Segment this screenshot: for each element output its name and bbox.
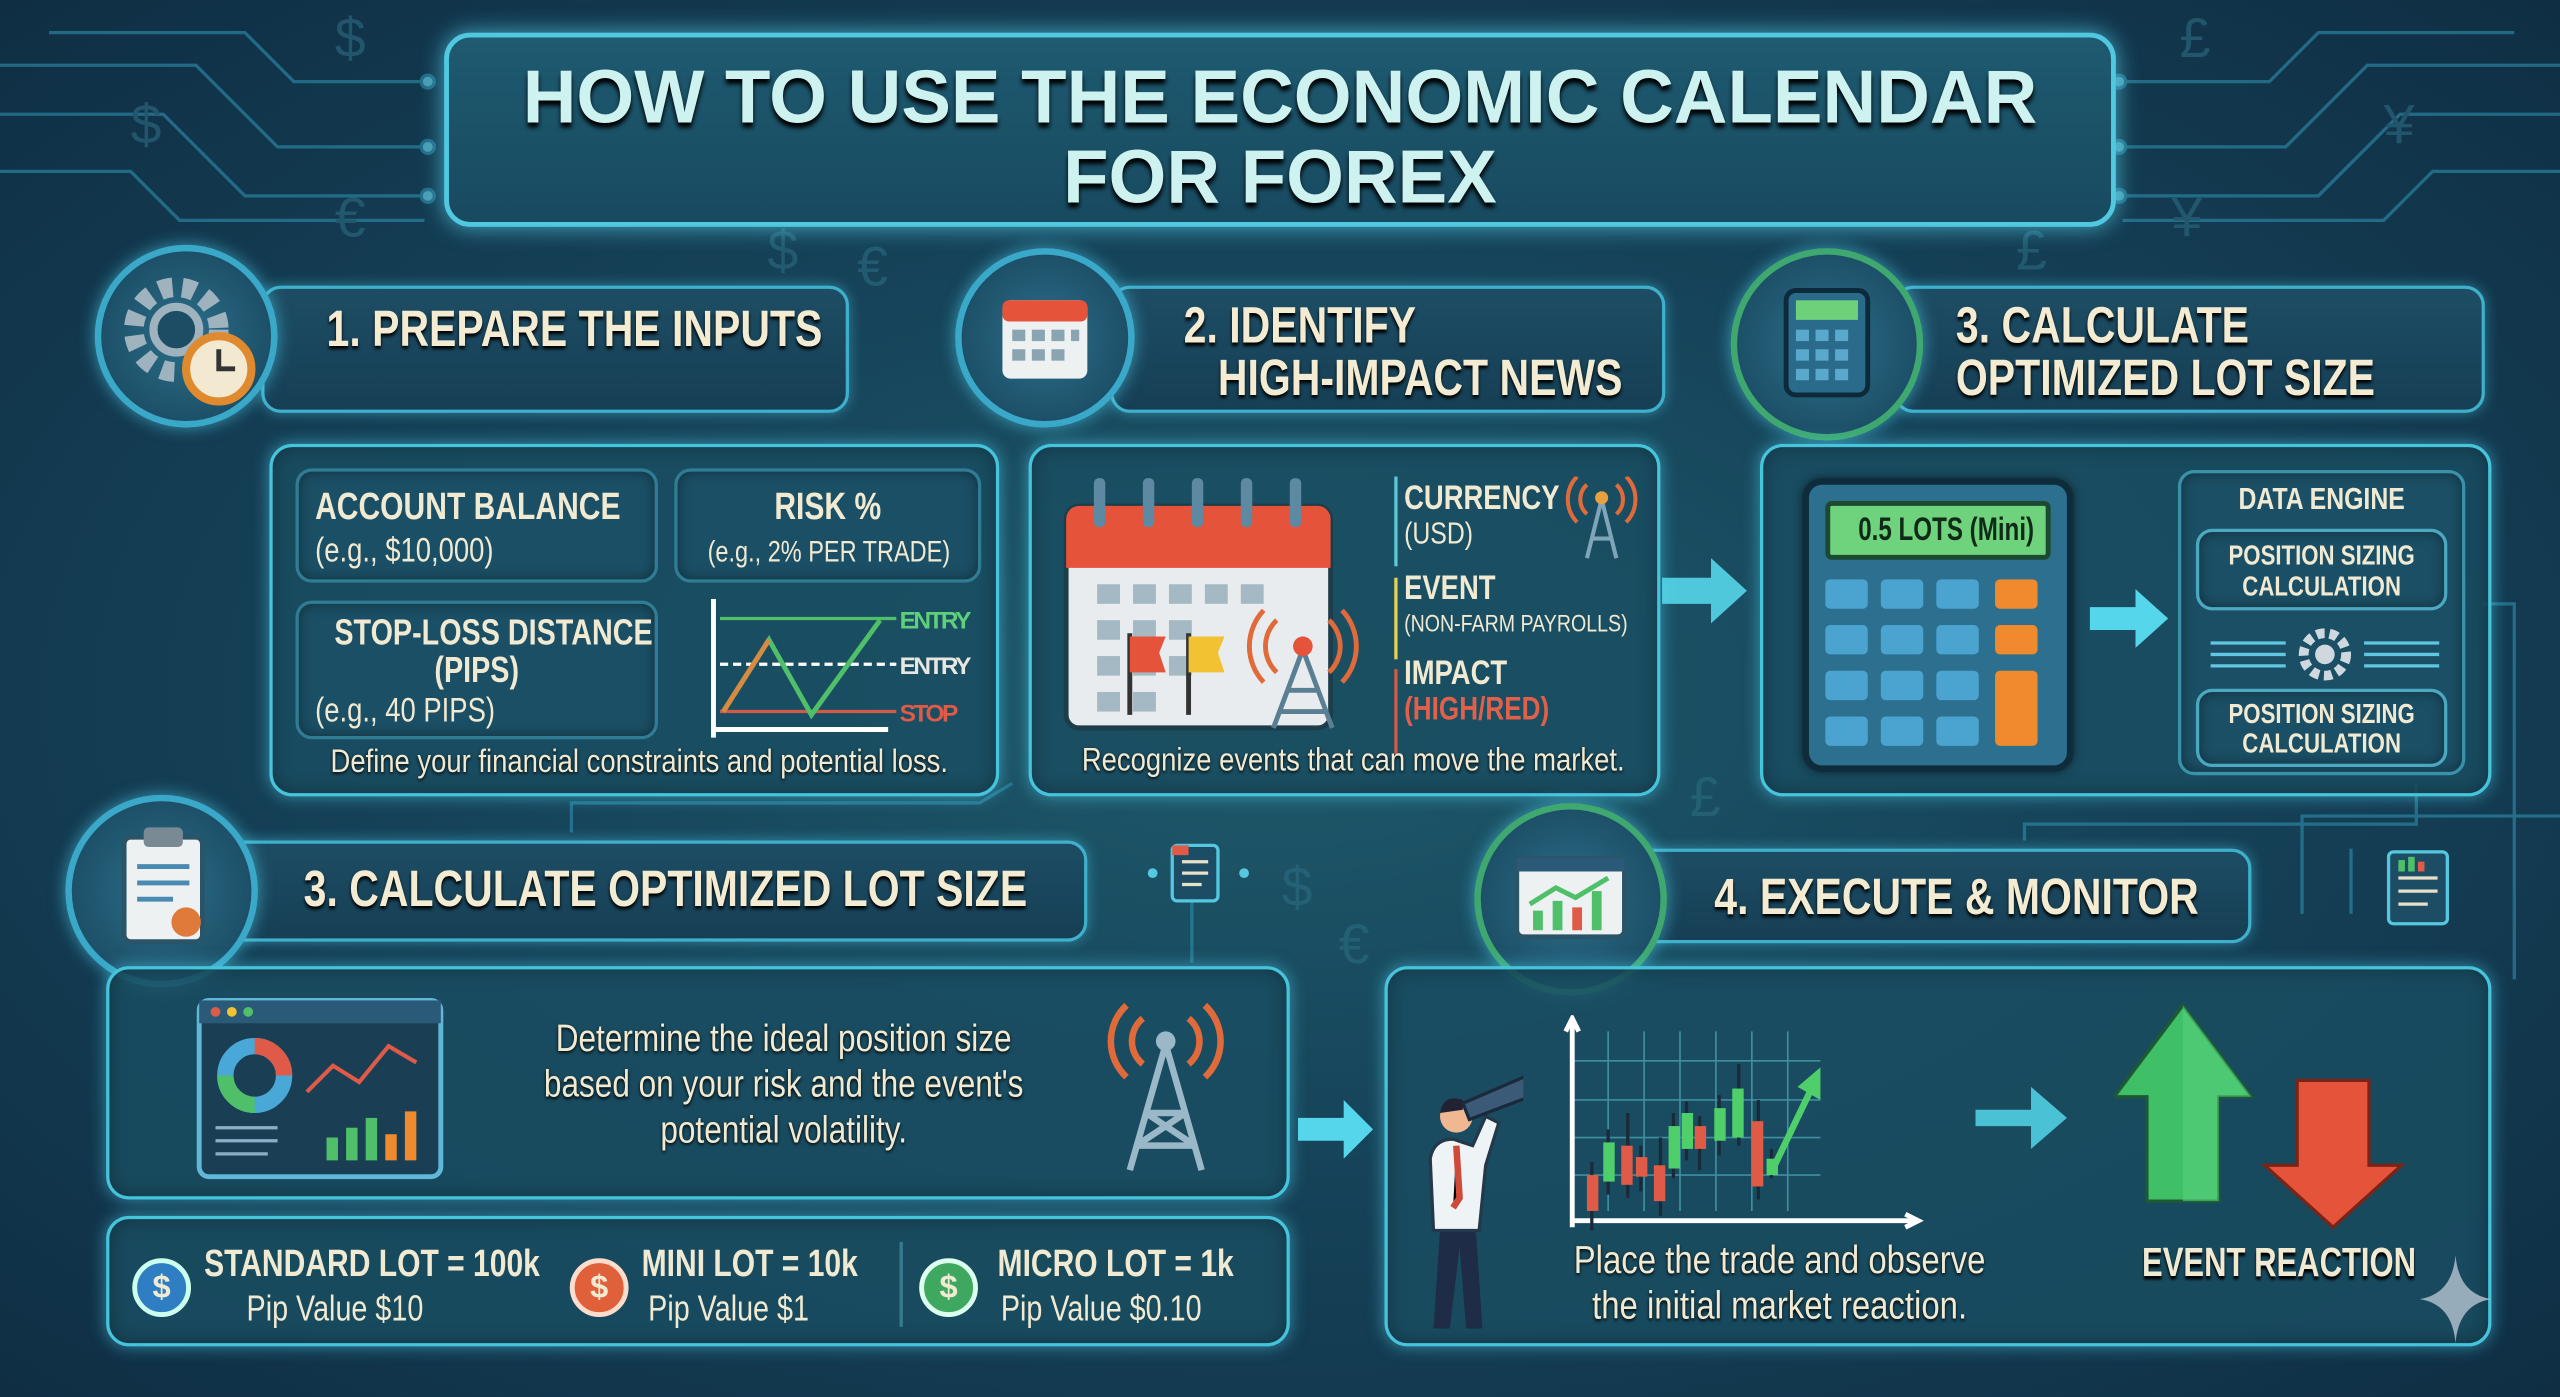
arrow	[1976, 1087, 2067, 1149]
labels: currency event impact: EVENT	[1404, 570, 1496, 607]
micro lot: Pip Value $0.10	[1001, 1288, 1202, 1328]
step 2 header	[945, 238, 1672, 438]
account balance box: ACCOUNT BALANCE	[315, 485, 621, 527]
icon: sparkle	[2420, 1256, 2492, 1343]
risk box: (e.g., 2% PER TRADE)	[708, 535, 950, 568]
data engine box: CALCULATION	[2242, 571, 2401, 602]
micro lot: MICRO LOT = 1k	[998, 1242, 1234, 1284]
labels: currency event impact: (HIGH/RED)	[1404, 692, 1549, 728]
data engine box	[2178, 470, 2465, 775]
background circuit decoration: €	[857, 236, 888, 298]
mini lot	[570, 1242, 858, 1328]
step 3b header	[55, 784, 1094, 988]
chart: entry stop: STOP	[900, 700, 958, 727]
background circuit decoration: $	[1282, 856, 1312, 918]
panel: calculate lot size	[1760, 444, 2491, 796]
background circuit decoration: $	[767, 219, 798, 281]
data engine box: DATA ENGINE	[2238, 483, 2405, 517]
standard lot: STANDARD LOT = 100k	[204, 1242, 540, 1284]
chart: entry stop: ENTRY	[900, 607, 971, 634]
stop-loss box	[296, 601, 658, 739]
background circuit decoration: £	[2016, 219, 2047, 281]
chart: candlesticks	[1564, 1015, 1924, 1230]
title	[444, 33, 2116, 227]
background circuit decoration: $	[131, 94, 161, 156]
title: HOW TO USE THE ECONOMIC CALENDAR	[523, 54, 2037, 139]
chart: entry stop: ENTRY	[900, 653, 971, 680]
caption: Place the trade and observe	[1574, 1239, 1985, 1283]
step 4 header: 4. EXECUTE & MONITOR	[1714, 868, 2199, 925]
caption: Define your financial constraints and potential loss.	[331, 744, 948, 780]
icon: calendar	[955, 248, 1135, 428]
stop-loss box: (PIPS)	[434, 650, 519, 690]
text block	[544, 1017, 1024, 1154]
icon: small document node	[1148, 844, 1249, 902]
arrow: panel 2 to 3	[1662, 558, 1747, 624]
mini lot: MINI LOT = 10k	[642, 1242, 858, 1284]
step 2 header: 2. IDENTIFY	[1184, 297, 1416, 354]
background circuit decoration: €	[1339, 913, 1370, 975]
micro lot	[919, 1242, 1234, 1328]
step 2 header: HIGH-IMPACT NEWS	[1218, 349, 1622, 406]
icon: calculator 0.5 lots: 0.5 LOTS (Mini)	[1858, 512, 2034, 548]
icon: dashboard	[196, 998, 444, 1180]
stop-loss box: STOP-LOSS DISTANCE	[334, 612, 653, 653]
step 4 header	[1465, 796, 2259, 996]
step 3 header: 3. CALCULATE	[1956, 297, 2249, 354]
icon: clipboard	[65, 795, 258, 987]
labels: currency event impact: (USD)	[1404, 517, 1473, 552]
panel: execute and monitor	[1384, 966, 2491, 1346]
title: FOR FOREX	[1063, 134, 1497, 219]
risk box	[674, 468, 981, 583]
labels: currency event impact: IMPACT	[1404, 654, 1507, 692]
data engine box: CALCULATION	[2242, 728, 2401, 759]
panel: prepare inputs	[269, 444, 999, 796]
account balance box	[296, 468, 658, 583]
data engine box: POSITION SIZING	[2228, 540, 2415, 571]
icon: calculator	[1731, 248, 1923, 441]
label: event reaction: EVENT REACTION	[2142, 1240, 2416, 1286]
icon: gear and clock	[95, 245, 278, 428]
icon: tower	[1108, 1002, 1224, 1171]
step 3 header: OPTIMIZED LOT SIZE	[1956, 349, 2375, 406]
data engine box: POSITION SIZING	[2228, 698, 2415, 730]
background circuit decoration: €	[335, 187, 366, 249]
labels: currency event impact: (NON-FARM PAYROLLS)	[1404, 610, 1628, 638]
icon: calculator 0.5 lots	[1802, 478, 2073, 772]
icon: calendar with flags and tower	[1064, 478, 1359, 730]
step 3 header	[1720, 238, 2492, 444]
icon: man with telescope	[1428, 1076, 1524, 1328]
stop-loss box: (e.g., 40 PIPS)	[315, 692, 495, 730]
account balance box: (e.g., $10,000)	[315, 532, 494, 570]
text block: based on your risk and the event's	[544, 1062, 1023, 1105]
background circuit decoration: ¥	[2170, 187, 2202, 249]
chart: entry stop	[711, 599, 971, 738]
standard lot	[132, 1242, 540, 1328]
mini lot: Pip Value $1	[648, 1288, 809, 1328]
icon: small chart node	[2386, 850, 2449, 926]
standard lot: Pip Value $10	[247, 1288, 423, 1328]
mini lot: $	[590, 1270, 608, 1306]
panel: lot size detail	[106, 966, 1290, 1200]
labels: currency event impact	[1394, 476, 1638, 754]
background circuit decoration: ¥	[2383, 94, 2415, 156]
caption: Recognize events that can move the market.	[1082, 743, 1625, 778]
caption: the initial market reaction.	[1592, 1284, 1967, 1328]
labels: currency event impact: CURRENCY	[1404, 480, 1560, 517]
step 1 header	[84, 234, 856, 438]
text block: potential volatility.	[660, 1108, 907, 1151]
arrow	[2090, 589, 2168, 648]
arrow: lower panel to execute	[1298, 1100, 1373, 1159]
standard lot: $	[153, 1270, 171, 1306]
step 1 header: 1. PREPARE THE INPUTS	[327, 300, 822, 357]
background circuit decoration: £	[2180, 7, 2210, 69]
step 3b header: 3. CALCULATE OPTIMIZED LOT SIZE	[304, 860, 1027, 917]
risk box: RISK %	[774, 485, 881, 527]
background circuit decoration: $	[335, 7, 366, 69]
lot types bar	[106, 1216, 1290, 1346]
text block: Determine the ideal position size	[556, 1017, 1012, 1059]
background circuit decoration: £	[1690, 766, 1721, 828]
icon: up down arrows	[2114, 1002, 2406, 1230]
caption	[1574, 1239, 1986, 1328]
micro lot: $	[939, 1270, 958, 1306]
panel: identify news	[1029, 444, 1660, 796]
icon: monitor chart	[1474, 803, 1667, 996]
